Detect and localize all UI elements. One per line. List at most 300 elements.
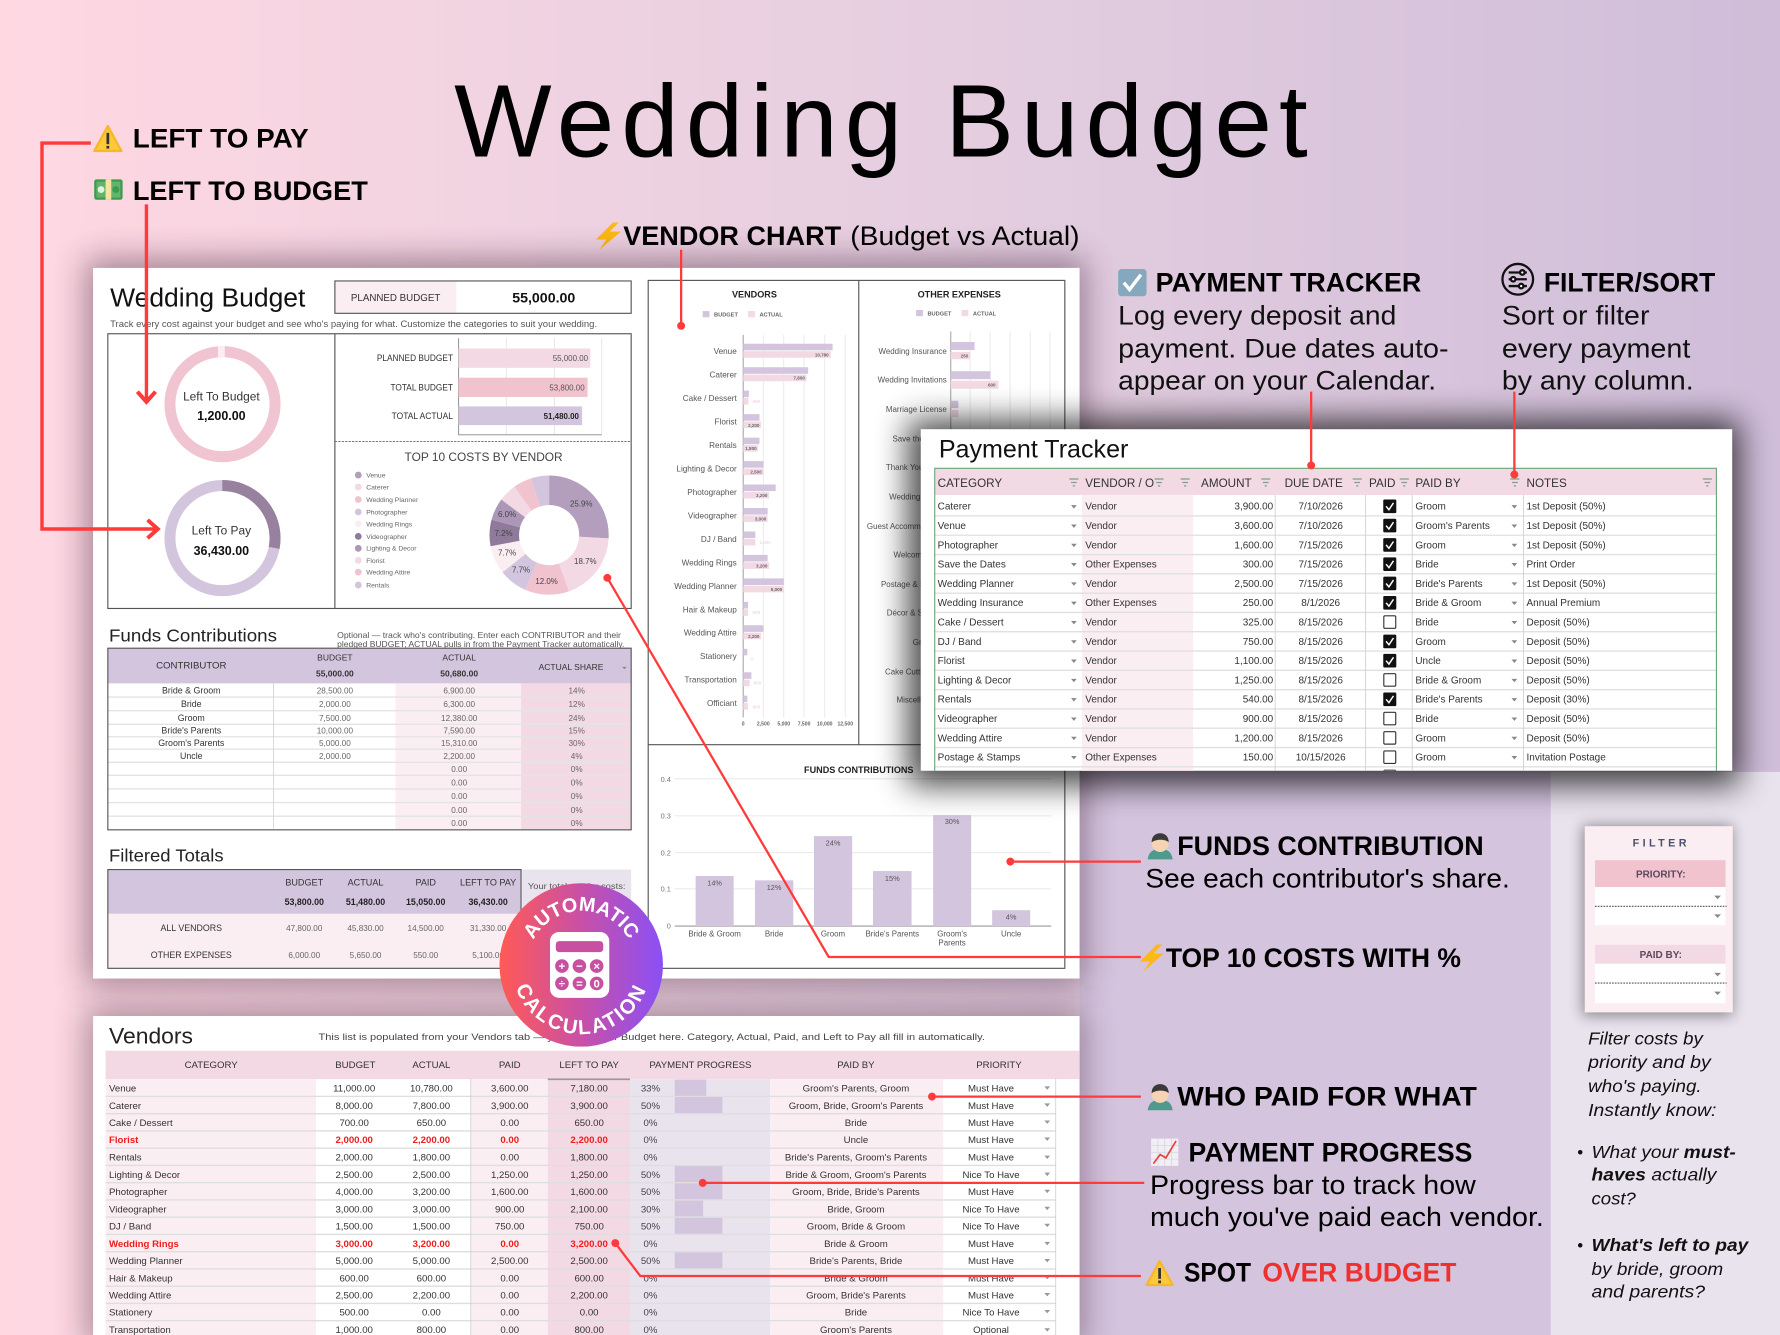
callout: spot over budget: OVER BUDGET <box>1262 1257 1457 1288</box>
budget column: 2,500.00 <box>335 1291 373 1302</box>
notes column: Deposit (50%) <box>1527 675 1590 686</box>
chart: funds contributions share: 0.4 <box>661 775 671 784</box>
chart: vendors budget vs actual: 2,200 <box>748 423 760 428</box>
table: filtered totals: 5,650.00 <box>350 951 382 960</box>
due date column: 7/15/2026 <box>1299 560 1343 571</box>
chart: funds contributions share: FUNDS CONTRIBUTIONS <box>804 765 914 775</box>
budget column: 3,000.00 <box>335 1204 373 1215</box>
left to pay column: 750.00 <box>574 1221 604 1232</box>
category column: Wedding Attire <box>109 1291 171 1302</box>
chart: vendors budget vs actual: 2,200 <box>748 634 760 639</box>
category column: Videographer <box>109 1204 167 1215</box>
chart: funds contributions share: Bride & Groom <box>688 930 741 939</box>
text: filter description: Filter costs by <box>1588 1028 1704 1048</box>
chart: vendors budget vs actual: 12,500 <box>837 721 853 727</box>
table: funds contributions: Bride's Parents <box>161 725 222 735</box>
callout: payment tracker: PAYMENT TRACKER <box>1156 267 1422 298</box>
actual column: 7,800.00 <box>413 1101 450 1112</box>
priority filter <box>1595 860 1727 925</box>
category column: Wedding Planner <box>938 579 1015 590</box>
legend: Wedding Attire <box>366 570 411 577</box>
vendors heading: Vendors <box>109 1023 193 1048</box>
vendors subtitle: This list is populated from your Vendors tab — you enter your Budget here. Category, Actual, Paid, and Left to Pay all fill in automatically. <box>319 1032 985 1043</box>
callout: filter/sort: by any column. <box>1502 364 1694 395</box>
actual column: 5,000.00 <box>413 1256 450 1267</box>
vendors table: PRIORITY <box>976 1060 1022 1071</box>
paid by column: Groom, Bride, Bride's Parents <box>792 1187 920 1198</box>
badge: automatic calculation: AUTOMATIC <box>525 896 638 940</box>
chart: budget summary bars: 51,480.00 <box>544 412 580 421</box>
callout: vendor chart: (Budget vs Actual) <box>850 220 1080 251</box>
table: filtered totals: 14,500.00 <box>408 924 444 933</box>
paid column: 900.00 <box>495 1204 524 1215</box>
vendors table: CATEGORY <box>185 1060 238 1071</box>
paid by column <box>785 1083 927 1335</box>
actual column: 1,500.00 <box>413 1221 450 1232</box>
tracker table <box>935 468 1716 783</box>
callout: filter/sort: Sort or filter <box>1502 300 1649 331</box>
budget bars <box>743 344 833 702</box>
chart: vendors budget vs actual: Wedding Rings <box>682 558 737 567</box>
table: filtered totals: 51,480.00 <box>346 897 385 907</box>
heading: funds contributions: Funds Contributions <box>109 625 277 645</box>
paid by column: Groom's Parents <box>1415 521 1490 532</box>
vendor column: Vendor <box>1085 579 1118 590</box>
callout: left to pay: LEFT TO PAY <box>133 123 309 154</box>
dashboard heading: Wedding Budget <box>110 283 306 313</box>
priority column: Must Have <box>968 1101 1014 1112</box>
callout: payment tracker: payment. Due dates auto- <box>1118 333 1449 364</box>
progress percent column: 30% <box>641 1204 661 1215</box>
chart: funds contributions share: Bride <box>765 930 784 939</box>
chart: vendors budget vs actual: 7,500 <box>798 721 811 727</box>
icon: bolt <box>596 222 621 250</box>
left to pay column: 2,100.00 <box>570 1204 608 1215</box>
category column: Wedding Planner <box>109 1256 183 1267</box>
left to pay column: 1,800.00 <box>570 1153 608 1164</box>
progress percent column: 0% <box>644 1153 658 1164</box>
chart: vendors budget vs actual: 3,200 <box>756 563 768 568</box>
connector: top 10 costs <box>603 574 1141 957</box>
vendor column: Vendor <box>1085 502 1118 513</box>
budget column: 4,000.00 <box>335 1187 373 1198</box>
table: funds contributions: 2,000.00 <box>319 752 351 761</box>
table: funds contributions: 5,000.00 <box>319 739 351 748</box>
actual column: 3,200.00 <box>413 1239 450 1250</box>
paid column: 0.00 <box>500 1153 519 1164</box>
text: filter description: Instantly know: <box>1588 1100 1717 1120</box>
table: funds contributions: 2,000.00 <box>319 700 351 709</box>
table: funds contributions: 0.00 <box>451 765 468 774</box>
category column: Photographer <box>109 1187 168 1198</box>
chart: vendors budget vs actual: 10,000 <box>817 721 833 727</box>
table: funds contributions: Bride <box>181 699 202 709</box>
table: filtered totals: 6,000.00 <box>288 951 321 960</box>
due date column: 7/10/2026 <box>1299 502 1343 513</box>
callout: spot over budget: SPOT <box>1184 1257 1251 1288</box>
vendor column: Vendor <box>1085 656 1118 667</box>
paid by column: Bride <box>845 1308 867 1319</box>
chart: vendors budget vs actual: Caterer <box>710 371 737 380</box>
paid column: 0.00 <box>500 1308 519 1319</box>
chart: vendors budget vs actual: 7,800 <box>794 376 805 381</box>
table: funds contributions: Groom <box>178 713 205 723</box>
donut: left to budget <box>170 352 275 457</box>
chart: funds contributions share: Groom <box>821 930 846 939</box>
chart: vendors budget vs actual: VENDORS <box>732 289 777 299</box>
header filter icons <box>1069 479 1712 486</box>
progress bars <box>675 1080 722 1269</box>
chart: vendors budget vs actual: 10,780 <box>815 352 829 357</box>
chart: funds contributions share: 0 <box>667 922 671 931</box>
shadow <box>1582 825 1732 1016</box>
legend: Wedding Rings <box>366 521 413 528</box>
text: filter description: What your must- <box>1592 1142 1736 1162</box>
paid by column: Groom <box>1415 753 1446 764</box>
priority column <box>963 1083 1020 1335</box>
category column: Videographer <box>938 714 998 725</box>
chart: vendors budget vs actual <box>674 289 853 727</box>
legend: Rentals <box>366 582 390 589</box>
priority column: Must Have <box>968 1273 1014 1284</box>
chart: vendors budget vs actual: 650 <box>753 399 761 404</box>
vendor column: Vendor <box>1085 733 1118 744</box>
paid by column: Bride & Groom <box>1415 598 1481 609</box>
chart: other expenses: BUDGET <box>927 312 952 318</box>
notes column: Deposit (50%) <box>1527 617 1590 628</box>
vendor column: Other Expenses <box>1085 560 1157 571</box>
paid by column: Bride & Groom <box>824 1239 888 1250</box>
paid by column: Uncle <box>844 1135 868 1146</box>
table: funds contributions: 4% <box>571 752 583 761</box>
priority column: Must Have <box>968 1256 1014 1267</box>
tracker table: PAID <box>1369 477 1395 490</box>
table: filtered totals: 53,800.00 <box>285 897 324 907</box>
amount column: 1,250.00 <box>1234 675 1274 686</box>
panel: vendors <box>93 1016 1080 1335</box>
chart: top 10 costs by vendor: 18.7% <box>574 557 597 566</box>
chart: top 10 costs by vendor: TOP 10 COSTS BY VENDOR <box>405 450 563 464</box>
vendor column: Other Expenses <box>1085 753 1157 764</box>
actual column: 3,000.00 <box>413 1204 450 1215</box>
due date column: 8/15/2026 <box>1299 617 1343 628</box>
chart: vendors budget vs actual: DJ / Band <box>701 535 737 544</box>
panel: payment tracker <box>921 429 1732 783</box>
callout: funds contribution: FUNDS CONTRIBUTION <box>1177 830 1484 861</box>
callout: filter/sort <box>1502 264 1716 395</box>
vendor column: Vendor <box>1085 521 1118 532</box>
due date column: 8/15/2026 <box>1299 733 1343 744</box>
planned budget box: PLANNED BUDGET <box>351 293 440 304</box>
chart: funds contributions share: 15% <box>885 874 900 883</box>
amount column: 325.00 <box>1243 617 1274 628</box>
text: filter description: haves actually <box>1592 1165 1718 1185</box>
notes column: 1st Deposit (50%) <box>1527 521 1606 532</box>
callout: top 10 costs: TOP 10 COSTS WITH % <box>1166 942 1461 973</box>
priority column: Must Have <box>968 1239 1014 1250</box>
donut: left to pay <box>170 486 275 591</box>
legend: Florist <box>366 558 385 565</box>
callout: payment progress: much you've paid each vendor. <box>1150 1201 1544 1232</box>
actual column: 2,200.00 <box>413 1291 450 1302</box>
chart: vendors budget vs actual: BUDGET <box>714 313 738 319</box>
amount column <box>1234 502 1274 764</box>
chart: vendors budget vs actual: Venue <box>714 347 737 356</box>
category column: Lighting & Decor <box>938 675 1012 686</box>
paid by column: Groom <box>1415 733 1446 744</box>
paid column: 0.00 <box>500 1118 519 1129</box>
due date column: 8/15/2026 <box>1299 656 1343 667</box>
table: funds contributions: 55,000.00 <box>316 669 354 679</box>
arrow: left to budget <box>137 204 156 402</box>
priority column: Must Have <box>968 1187 1014 1198</box>
due date column: 8/1/2026 <box>1301 598 1341 609</box>
callout: payment tracker: appear on your Calendar. <box>1118 364 1436 395</box>
progress percent column: 0% <box>644 1118 658 1129</box>
paid by column: Bride, Groom <box>827 1204 885 1215</box>
vendor column: Vendor <box>1085 695 1118 706</box>
left to pay column: 0.00 <box>580 1308 599 1319</box>
chart: other expenses: Guest Accommodation <box>867 522 947 531</box>
notes column: 1st Deposit (50%) <box>1527 579 1606 590</box>
side panel background <box>1551 772 1780 1335</box>
vendor column: Vendor <box>1085 675 1118 686</box>
legend: Videographer <box>366 534 408 541</box>
table: filtered totals: 5,100.00 <box>472 951 504 960</box>
table: filtered totals: OTHER EXPENSES <box>151 950 232 960</box>
table: funds contributions: 50,680.00 <box>440 669 478 679</box>
chart: funds contributions share: Parents <box>938 939 966 948</box>
chart: vendors budget vs actual: 0 <box>750 657 753 662</box>
callout: payment tracker: Log every deposit and <box>1118 300 1396 331</box>
priority column: Must Have <box>968 1118 1014 1129</box>
chart: top 10 costs by vendor: 7.7% <box>512 566 530 575</box>
notes column: Invitation Postage <box>1527 753 1606 764</box>
paid by column: Bride's Parents, Groom's Parents <box>785 1153 927 1164</box>
callout: vendor chart <box>596 220 1080 251</box>
paid by filter: PAID BY: <box>1640 950 1682 961</box>
panel: filter widget <box>1585 826 1733 1012</box>
chart: budget summary bars: TOTAL ACTUAL <box>392 411 453 421</box>
note: funds contributions: pledged BUDGET; ACTUAL pulls in from the Payment Tracker automatically. <box>337 640 624 649</box>
table: funds contributions: Uncle <box>180 751 203 761</box>
chart: vendors budget vs actual: Officiant <box>707 699 737 708</box>
notes column <box>1527 502 1606 764</box>
category column: Cake / Dessert <box>938 617 1004 628</box>
table: funds contributions: Bride & Groom <box>162 686 221 696</box>
text: filter description: who's paying. <box>1588 1076 1702 1096</box>
progress percent column <box>641 1083 661 1335</box>
chart: other expenses <box>867 289 1050 717</box>
vendors table: PAYMENT PROGRESS <box>649 1060 751 1071</box>
note: your totals <box>522 870 631 968</box>
budget column: 5,000.00 <box>335 1256 373 1267</box>
paid column: 1,250.00 <box>491 1170 528 1181</box>
left to pay column: 3,200.00 <box>570 1239 608 1250</box>
callout: left to budget: LEFT TO BUDGET <box>133 175 368 206</box>
table: funds contributions: 0% <box>571 819 583 828</box>
actual column: 0.00 <box>422 1308 441 1319</box>
paid column: 2,500.00 <box>491 1256 528 1267</box>
table: filtered totals: LEFT TO PAY <box>460 877 516 887</box>
donut: left to budget: Left To Budget <box>183 390 260 404</box>
amount column: 1,600.00 <box>1234 540 1274 551</box>
table: funds contributions: 0% <box>571 765 583 774</box>
chart: budget summary bars: 53,800.00 <box>549 384 585 393</box>
priority column: Must Have <box>968 1135 1014 1146</box>
table: funds contributions: ACTUAL <box>442 653 476 663</box>
notes column: Deposit (50%) <box>1527 733 1590 744</box>
icon: calculator: ÷ <box>559 978 565 990</box>
notes column: 1st Deposit (50%) <box>1527 502 1606 513</box>
tracker table: AMOUNT <box>1201 477 1252 490</box>
vendor column <box>1085 502 1157 764</box>
chart: funds contributions share: 0.2 <box>661 848 671 857</box>
paid by column: Bride <box>1415 617 1439 628</box>
tracker heading: Payment Tracker <box>939 435 1128 463</box>
progress percent column: 33% <box>641 1083 661 1094</box>
icon: warning <box>1147 1261 1173 1285</box>
category column: Postage & Stamps <box>938 753 1020 764</box>
icon: person <box>1148 833 1173 859</box>
amount column: 2,500.00 <box>1234 579 1274 590</box>
vendors table: PAID <box>499 1060 521 1071</box>
paid by column: Groom <box>1415 540 1446 551</box>
budget column: 700.00 <box>339 1118 369 1129</box>
table: funds contributions: 6,900.00 <box>443 687 476 696</box>
chart: vendors budget vs actual: 5,000 <box>777 721 790 727</box>
chart: budget summary bars <box>377 338 602 435</box>
priority column: Must Have <box>968 1153 1014 1164</box>
legend: Venue <box>366 472 386 479</box>
tracker table: NOTES <box>1527 477 1567 490</box>
paid by column: Bride & Groom, Groom's Parents <box>785 1170 927 1181</box>
chart: other expenses: Miscellaneous <box>896 696 947 705</box>
table: funds contributions: 7,500.00 <box>319 714 351 723</box>
chart: vendors budget vs actual: Transportation <box>684 676 737 685</box>
actual column: 650.00 <box>417 1118 446 1129</box>
chart: vendors budget vs actual: 1,500 <box>759 540 771 545</box>
actual bars <box>743 351 831 710</box>
category column: DJ / Band <box>938 637 981 648</box>
table: funds contributions: 14% <box>569 687 585 696</box>
chart: vendors budget vs actual: Florist <box>715 418 737 427</box>
category column <box>938 502 1024 764</box>
progress percent column: 50% <box>641 1101 661 1112</box>
tracker table: PAID BY <box>1415 477 1461 490</box>
category column: Florist <box>938 656 965 667</box>
text: filter description: priority and by <box>1587 1052 1712 1072</box>
paid checkboxes <box>1383 499 1396 783</box>
paid by filter <box>1595 945 1727 1003</box>
vendor column: Vendor <box>1085 540 1118 551</box>
category column: DJ / Band <box>109 1221 151 1232</box>
heading: filtered totals: Filtered Totals <box>109 846 224 866</box>
due date column: 10/15/2026 <box>1296 753 1346 764</box>
chart: vendors budget vs actual: ACTUAL <box>759 313 783 319</box>
priority column: Nice To Have <box>963 1221 1020 1232</box>
chart: vendors budget vs actual: Wedding Attire <box>684 629 737 638</box>
chart: vendors budget vs actual: Wedding Planner <box>674 582 737 591</box>
table: filtered totals: ALL VENDORS <box>160 923 222 933</box>
icon: warning <box>94 126 121 151</box>
chart: funds contributions share: 0.1 <box>661 885 671 894</box>
callout: spot over budget <box>1147 1257 1457 1288</box>
priority column: Nice To Have <box>963 1204 1020 1215</box>
amount column: 750.00 <box>1243 637 1274 648</box>
paid column: 3,600.00 <box>491 1083 528 1094</box>
icon: calculator: − <box>576 961 583 973</box>
chart: other expenses: Marriage License <box>886 405 947 414</box>
paid by column: Bride <box>845 1118 867 1129</box>
due date column: 8/15/2026 <box>1299 714 1343 725</box>
left to pay column: 1,250.00 <box>570 1170 608 1181</box>
paid by column: Groom <box>1415 502 1446 513</box>
paid by column: Uncle <box>1415 656 1441 667</box>
panel: dashboard <box>93 268 1080 979</box>
paid by column: Bride <box>1415 560 1439 571</box>
icon: calculator: × <box>593 961 600 973</box>
paid by column: Bride's Parents, Bride <box>810 1256 902 1267</box>
callout: payment progress <box>1150 1136 1544 1232</box>
left to pay column <box>570 1083 608 1335</box>
table: funds contributions: 0% <box>571 792 583 801</box>
donut: left to budget: 1,200.00 <box>197 409 246 423</box>
chart: vendors budget vs actual: 600 <box>753 610 761 615</box>
connector: vendor chart <box>677 250 685 330</box>
due date column: 7/10/2026 <box>1299 521 1343 532</box>
table: filtered totals: 15,050.00 <box>406 897 445 907</box>
category column: Stationery <box>109 1308 153 1319</box>
left to pay column: 1,600.00 <box>570 1187 608 1198</box>
chart: top 10 costs by vendor: 7.7% <box>498 549 516 558</box>
chart: vendors budget vs actual: 2,500 <box>750 469 762 474</box>
budget column: 3,000.00 <box>335 1239 373 1250</box>
paid by column: Bride & Groom <box>824 1273 888 1284</box>
table: funds contributions: 10,000.00 <box>317 726 353 735</box>
legend: Lighting & Decor <box>366 546 417 553</box>
chart: vendors budget vs actual: Hair & Makeup <box>683 605 737 614</box>
connector: who paid <box>928 1093 1141 1101</box>
table: funds contributions: 0% <box>571 779 583 788</box>
progress percent column: 50% <box>641 1256 661 1267</box>
amount column: 900.00 <box>1243 714 1274 725</box>
chart: other expenses: Cake Cutting Fee <box>885 667 947 676</box>
table: funds contributions: 0.00 <box>451 779 468 788</box>
amount column: 540.00 <box>1243 695 1274 706</box>
vendor column: Vendor <box>1085 714 1118 725</box>
chart: vendors budget vs actual: 1,800 <box>745 446 757 451</box>
note: your totals: Your total vendor costs: <box>528 881 625 891</box>
chart: vendors budget vs actual: Videographer <box>688 511 737 520</box>
donut: left to pay: Left To Pay <box>192 524 251 538</box>
paid by column: Groom, Bride & Groom <box>807 1221 905 1232</box>
vendors table: ACTUAL <box>412 1060 451 1071</box>
chart: top 10 costs by vendor: 6.0% <box>498 510 516 519</box>
actual column: 3,200.00 <box>413 1187 450 1198</box>
budget column: 2,500.00 <box>335 1170 373 1181</box>
tracker table: VENDOR / O <box>1085 477 1154 490</box>
chart: other expenses: Wedding Favors <box>889 492 947 501</box>
budget column: 8,000.00 <box>335 1101 373 1112</box>
chart: vendors budget vs actual: 0 <box>742 721 745 727</box>
priority column: Nice To Have <box>963 1308 1020 1319</box>
left to pay column: 650.00 <box>574 1118 604 1129</box>
chart: vendors budget vs actual: 5,000 <box>771 587 783 592</box>
callout: filter/sort: every payment <box>1502 333 1691 364</box>
chart: other expenses: Welcome Bags <box>894 550 947 559</box>
category column: Lighting & Decor <box>109 1170 181 1181</box>
